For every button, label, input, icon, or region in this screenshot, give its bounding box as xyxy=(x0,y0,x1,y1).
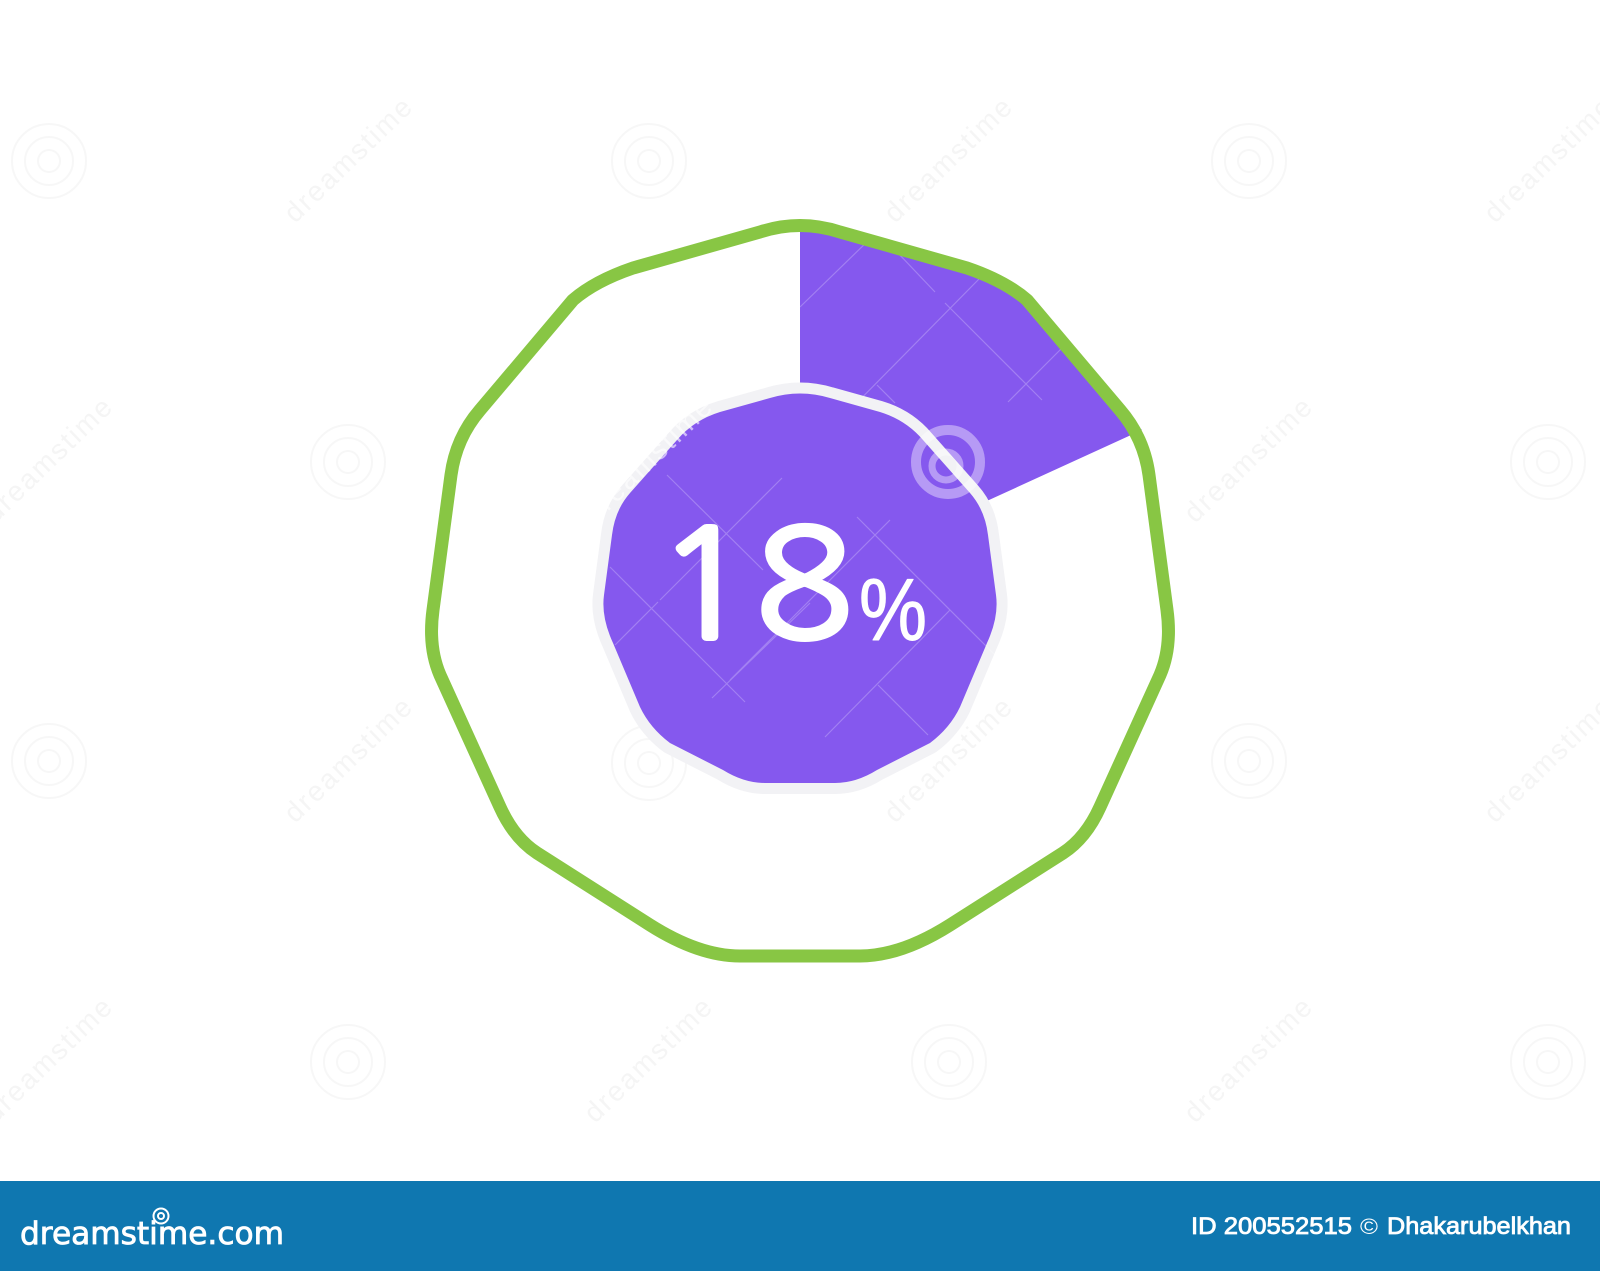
image id credit xyxy=(1191,1213,1571,1240)
sector watermark lines xyxy=(800,237,1065,430)
inner watermark lines xyxy=(610,475,1000,737)
percentage label xyxy=(655,510,927,660)
inner purple polygon xyxy=(603,394,997,783)
watermark text: dreamstime xyxy=(878,91,1018,228)
logo spiral icon xyxy=(154,1208,168,1224)
polygon percentage chart xyxy=(432,226,1168,956)
dreamstime logo text: dreamstime.com xyxy=(20,1216,284,1252)
outer green polygon ring xyxy=(432,226,1168,956)
inner polygon halo xyxy=(603,394,997,783)
watermark text: dreamstime xyxy=(1178,391,1318,528)
image id credit: ID 200552515 xyxy=(1191,1213,1352,1240)
percent sign: % xyxy=(859,560,927,659)
watermark text: dreamstime xyxy=(878,691,1018,828)
watermark text: dreamstime xyxy=(578,991,718,1128)
watermark text: dreamstime xyxy=(278,91,418,228)
image id credit: Dhakarubelkhan xyxy=(1387,1213,1571,1240)
watermark text: dreamstime xyxy=(278,691,418,828)
watermark text over inner polygon: dreamstime xyxy=(578,391,718,528)
watermark pattern xyxy=(12,124,1585,1099)
18% purple sector xyxy=(800,226,1142,560)
footer bar xyxy=(0,1181,1600,1271)
watermark spiral on chart xyxy=(916,430,980,494)
watermark text: dreamstime xyxy=(1178,991,1318,1128)
image id credit: © xyxy=(1360,1214,1378,1239)
number 18: 18 xyxy=(655,510,854,660)
